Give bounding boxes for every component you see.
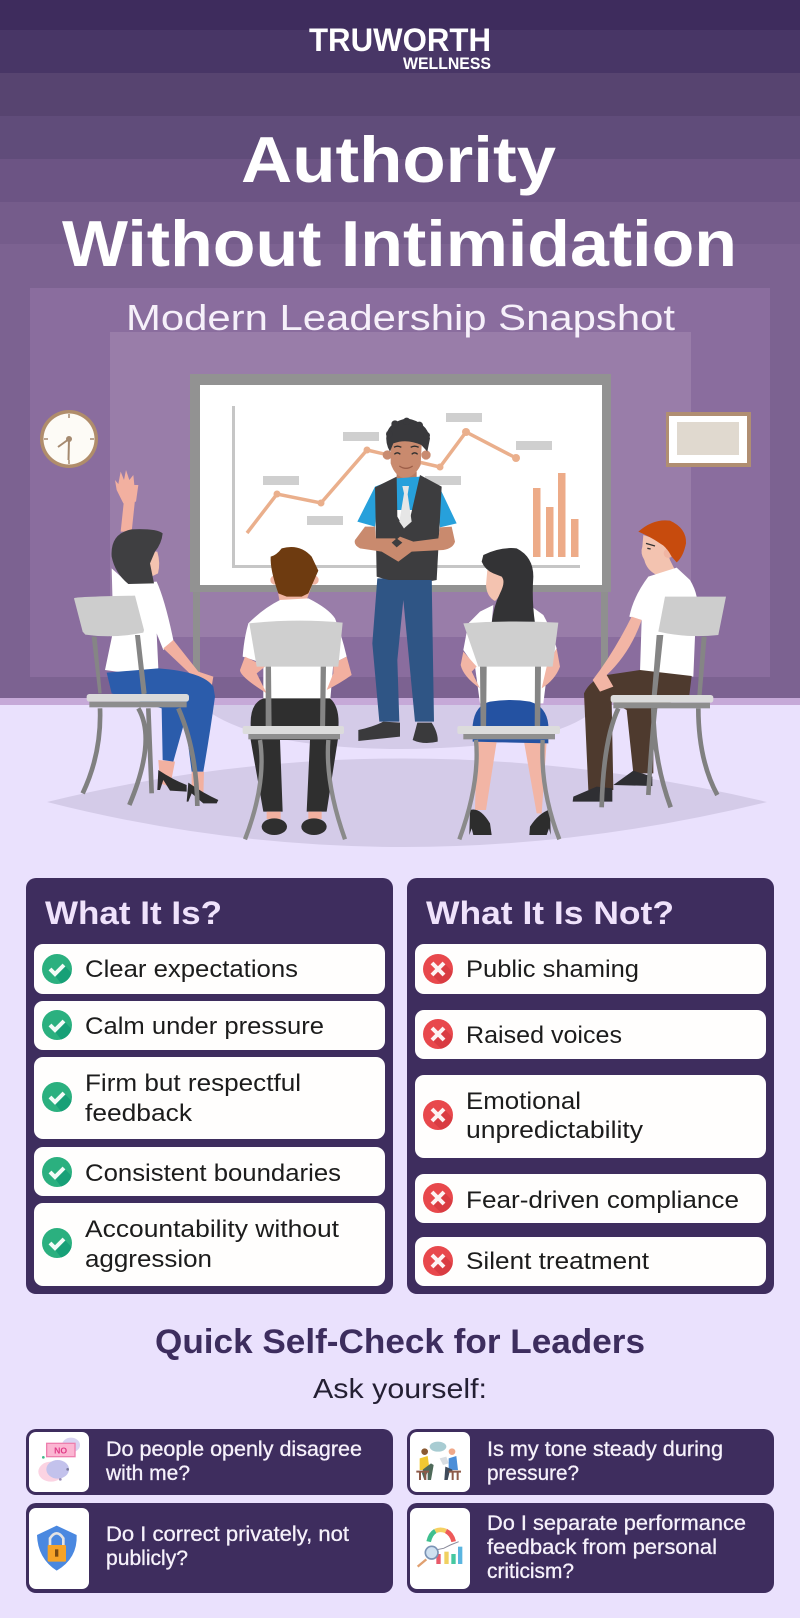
line chart <box>247 428 520 533</box>
heading: What It Is? <box>45 895 222 931</box>
seated woman from behind, long hair <box>457 548 560 839</box>
card: openly disagree: Do people openly disagree <box>106 1438 362 1461</box>
logo: WELLNESS <box>403 55 491 73</box>
row: firm but respectful feedback: Firm but respectful <box>85 1070 301 1097</box>
seated man from behind, brown hair <box>240 547 352 839</box>
row: calm under pressure <box>34 1001 385 1050</box>
panel: what it is <box>26 878 393 1294</box>
section heading: quick self-check: Quick Self-Check for Leaders <box>155 1323 645 1361</box>
row: emotional unpredictability: unpredictability <box>466 1117 643 1144</box>
framed picture <box>666 412 751 467</box>
row: fear-driven compliance <box>415 1174 766 1223</box>
section subheading: Ask yourself: <box>313 1373 487 1404</box>
icon: speech sign NO <box>38 1438 80 1482</box>
row: accountability without aggression: aggression <box>85 1246 212 1273</box>
card: tone steady: Is my tone steady during <box>487 1438 723 1461</box>
row: accountability without aggression: Accountability without <box>85 1216 339 1243</box>
card: tone steady: pressure? <box>487 1462 579 1485</box>
card: separate feedback: criticism? <box>487 1560 574 1583</box>
row: clear expectations: Clear expectations <box>85 956 298 983</box>
subtitle: Modern Leadership Snapshot <box>126 297 675 338</box>
row: raised voices: Raised voices <box>466 1022 622 1049</box>
chair <box>457 621 560 839</box>
icon: wall clock <box>40 410 98 468</box>
card: openly disagree <box>26 1429 393 1495</box>
right seated man, red hair <box>573 520 726 807</box>
row: public shaming <box>415 944 766 994</box>
card: separate feedback <box>407 1503 774 1593</box>
row: raised voices <box>415 1010 766 1059</box>
chart labels <box>263 413 552 525</box>
floor shadows <box>47 705 767 847</box>
row: public shaming: Public shaming <box>466 956 639 983</box>
row: clear expectations <box>34 944 385 994</box>
card: correct privately: publicly? <box>106 1547 188 1570</box>
icon: speech sign NO: NO <box>54 1445 67 1455</box>
presenter legs <box>358 578 438 743</box>
chart axes <box>234 406 580 566</box>
row: emotional unpredictability: Emotional <box>466 1088 581 1115</box>
whiteboard with chart <box>190 374 611 673</box>
row: emotional unpredictability <box>415 1075 766 1158</box>
chair <box>602 597 726 807</box>
row: consistent boundaries: Consistent boundaries <box>85 1160 341 1187</box>
row: silent treatment <box>415 1237 766 1286</box>
row: firm but respectful feedback: feedback <box>85 1100 193 1127</box>
title <box>62 123 737 280</box>
logo <box>309 22 491 73</box>
bar chart <box>533 473 578 557</box>
icon: two people talking <box>416 1442 461 1480</box>
row: firm but respectful feedback <box>34 1057 385 1139</box>
row: silent treatment: Silent treatment <box>466 1248 649 1275</box>
card: tone steady <box>407 1429 774 1495</box>
row: accountability without aggression <box>34 1203 385 1286</box>
card: separate feedback: Do I separate performance <box>487 1512 746 1535</box>
icon: shield with lock <box>37 1526 77 1571</box>
row: consistent boundaries <box>34 1147 385 1196</box>
logo: TRUWORTH <box>309 22 491 58</box>
panel: what it is not <box>407 878 774 1294</box>
row: fear-driven compliance: Fear-driven compliance <box>466 1187 739 1214</box>
chair <box>243 621 345 839</box>
card: correct privately: Do I correct privately, not <box>106 1523 349 1546</box>
title: Authority <box>241 123 556 196</box>
presenter torso and head <box>355 418 457 590</box>
icon: gauge and magnifier chart <box>418 1530 462 1567</box>
card: openly disagree: with me? <box>105 1462 190 1485</box>
heading: What It Is Not? <box>426 895 674 931</box>
presenter <box>355 418 457 743</box>
chair <box>74 596 197 806</box>
left seated woman with raised hand <box>74 470 218 806</box>
header wall with stepped bands <box>0 0 800 705</box>
card: correct privately <box>26 1503 393 1593</box>
title: Without Intimidation <box>62 207 737 280</box>
row: calm under pressure: Calm under pressure <box>85 1013 324 1040</box>
card: separate feedback: feedback from personal <box>487 1536 717 1559</box>
